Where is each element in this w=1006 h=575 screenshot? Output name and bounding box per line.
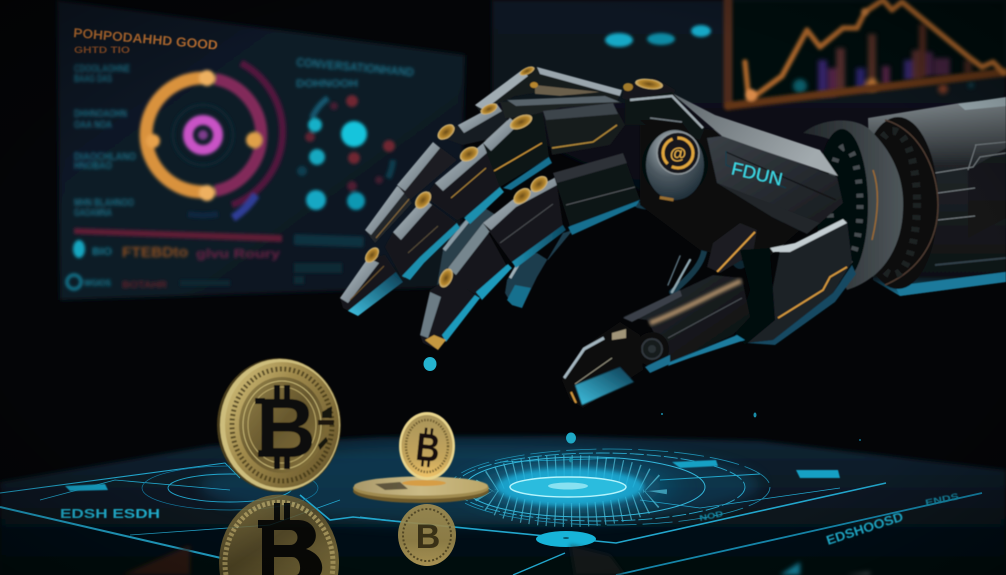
robotic arm	[340, 64, 1006, 408]
circuit lines	[0, 458, 982, 575]
dashboard left column text: DHHNOAOHN	[74, 108, 127, 120]
forearm top panel	[670, 92, 838, 176]
wrist ball joint	[642, 130, 708, 201]
hand mechanical core	[640, 120, 800, 265]
chart: price line	[728, 0, 1006, 106]
dashboard left column text: OAA NOA	[74, 119, 112, 131]
dashboard heading: GHTD TIO	[74, 45, 130, 55]
dashboard left column text: DIAOCHLANO	[74, 151, 136, 163]
table labels: ENDS	[924, 491, 960, 508]
thumb camera joint	[635, 332, 670, 373]
table labels	[60, 491, 960, 548]
icon: small bitcoin coin	[399, 412, 455, 480]
lower wrist panel	[707, 219, 856, 345]
forearm main panel with label	[707, 136, 843, 234]
finger: pinky behind	[505, 230, 573, 308]
label FDUN: FDUN	[729, 158, 785, 190]
icon: water droplets	[424, 357, 861, 462]
dashboard right heading: CONVERSATIONHAND	[296, 55, 415, 79]
dashboard right heading: DOHNOOH	[296, 78, 358, 90]
wrist ring grey	[803, 120, 903, 290]
table floor reflections	[122, 545, 870, 575]
table button	[536, 531, 596, 547]
dashboard right heading	[296, 55, 415, 90]
table labels: NOD	[699, 509, 724, 523]
dashboard footer: glvu Roury	[196, 246, 281, 261]
finger 2: long middle finger	[340, 103, 625, 316]
icon: large bitcoin coin	[217, 358, 341, 492]
panel: right chart screen	[492, 0, 1006, 200]
thumb tip	[562, 322, 643, 408]
chart: bars	[793, 24, 974, 96]
finger 3: front finger	[420, 153, 640, 350]
dashboard left column text	[74, 63, 136, 219]
dashboard footer: WGIOS	[84, 278, 111, 288]
finger 1: rear finger	[365, 96, 623, 243]
finger: top thumb-like	[475, 64, 622, 112]
icon: small bitcoin coin reflection	[398, 504, 456, 566]
thumb body	[623, 275, 750, 366]
dashboard heading: POHPODAHHD GOOD	[73, 25, 218, 53]
small bitcoin symbol: B	[414, 426, 442, 471]
cyan status pills	[605, 25, 711, 47]
table labels: EDSHOOSD	[824, 509, 905, 548]
panel: left dashboard screen	[57, 0, 465, 300]
chart: node cluster	[297, 95, 395, 210]
icon: base coin	[353, 476, 489, 503]
holographic glow rings	[445, 449, 770, 525]
dashboard left column text: GAOAMNA	[74, 207, 112, 219]
arm cylinder	[868, 97, 1006, 296]
dashboard left column text: HNOBAO	[74, 160, 112, 172]
knuckle cap	[622, 77, 675, 105]
panel: holographic table	[0, 436, 1006, 575]
dashboard footer	[67, 228, 364, 291]
table chips	[65, 460, 840, 491]
finger: ghost behind	[437, 205, 496, 285]
dashboard footer: FTEBDto	[122, 244, 188, 261]
at-sign emblem: @	[670, 144, 686, 163]
table ambient glow	[200, 445, 760, 525]
dashboard footer: BOTAHR	[122, 280, 168, 291]
bitcoin symbol: B	[256, 381, 316, 475]
chart: donut ring	[145, 63, 283, 218]
dashboard left column text: MHN BLAHNOO	[74, 197, 134, 209]
icon: large bitcoin coin reflection	[219, 495, 339, 575]
hand back plate	[625, 92, 705, 150]
wrist collar	[816, 129, 877, 281]
wrist ring outer	[858, 117, 938, 289]
dashboard footer: BIO	[92, 246, 112, 258]
table labels: EDSH ESDH	[60, 506, 160, 521]
dashboard left column text: BAAG DAS	[74, 73, 112, 85]
dashboard left column text: CDOOLAOHNE	[74, 63, 130, 75]
icon: small bitcoin coin reflection: B	[416, 518, 440, 556]
wires behind the hand	[638, 205, 740, 292]
